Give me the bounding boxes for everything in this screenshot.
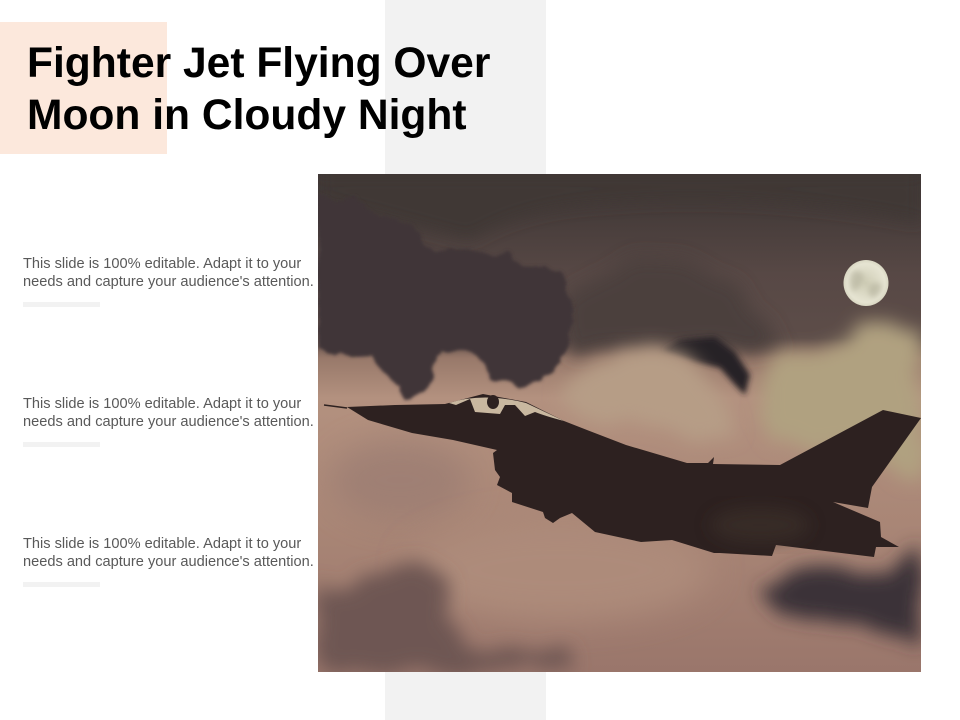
title	[27, 39, 490, 139]
dark cloud lower left	[318, 565, 575, 672]
fighter jet silhouette	[324, 394, 921, 557]
pink cloud glow left	[340, 441, 460, 510]
title: Moon in Cloudy Night	[27, 91, 467, 139]
canopy	[449, 398, 564, 421]
text block 3: This slide is 100% editable. Adapt it to your	[23, 536, 301, 552]
lit cloud center	[560, 345, 740, 440]
engine haze	[723, 514, 797, 552]
text block 2: needs and capture your audience's attention.	[23, 414, 314, 430]
text block 3	[23, 536, 314, 587]
text block 1: needs and capture your audience's attention.	[23, 274, 314, 290]
text block 1: This slide is 100% editable. Adapt it to your	[23, 256, 301, 272]
dark cloud lower right	[763, 545, 921, 640]
photo: fighter jet over moon in cloudy night	[318, 174, 921, 672]
title: Fighter Jet Flying Over	[27, 39, 490, 87]
mid brown haze cloud	[560, 254, 785, 355]
sky	[318, 174, 921, 672]
text block 3: needs and capture your audience's attention.	[23, 554, 314, 570]
large dark cloud	[318, 192, 572, 400]
lower pink cloud glow	[441, 550, 692, 620]
upper dark band	[428, 218, 489, 236]
background vertical band	[385, 0, 546, 720]
text block 2	[23, 396, 314, 447]
moon	[844, 260, 888, 306]
text block 1	[23, 256, 314, 307]
small dark cloud gap	[662, 337, 750, 395]
pale lit cloud right	[763, 323, 921, 480]
pilot	[487, 395, 499, 409]
title accent block	[0, 22, 167, 154]
text block 2: This slide is 100% editable. Adapt it to your	[23, 396, 301, 412]
